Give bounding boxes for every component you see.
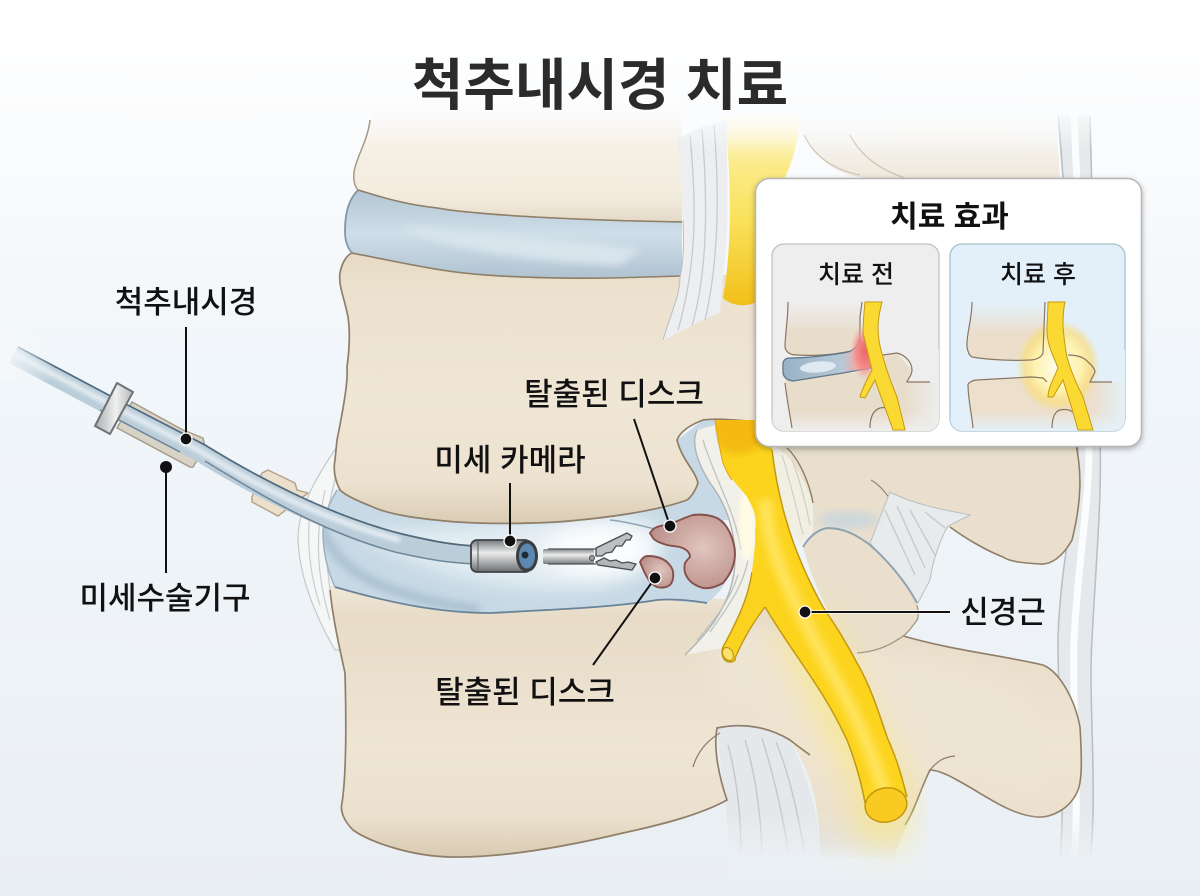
inset heading: 치료 효과 (890, 201, 1009, 234)
disc-side ligament (685, 425, 755, 655)
upper ligament (663, 120, 727, 340)
panel: before treatment: 치료 전 (818, 261, 894, 289)
tube fade (0, 335, 55, 380)
forceps (543, 533, 636, 570)
posterior ligament right (1058, 115, 1100, 860)
top vertebra (354, 108, 682, 222)
label: 탈출된 디스크 upper: 탈출된 디스크 (524, 377, 704, 412)
label: 미세 카메라 (434, 443, 586, 547)
micro camera (471, 540, 538, 572)
spine illustration (10, 115, 1102, 864)
lower disc (320, 420, 745, 613)
sheath collar (252, 470, 308, 516)
label: 미세수술기구: 미세수술기구 (79, 581, 251, 616)
label: 척추내시경 (115, 285, 257, 445)
panel: 치료 효과 (756, 178, 1142, 446)
label: 탈출된 디스크 lower (435, 572, 661, 710)
ring collar (95, 383, 133, 434)
bottom fade (728, 812, 1200, 884)
shadow patch above facet (818, 510, 878, 530)
pale strands right of nerve (772, 448, 813, 545)
endoscope (0, 335, 476, 564)
upper nerve (723, 115, 800, 305)
panel: before treatment (772, 244, 939, 431)
tube (13, 355, 476, 555)
label: 미세수술기구 (79, 461, 251, 616)
panel: after treatment: 치료 후 (1000, 261, 1076, 289)
middle posterior process (760, 430, 1080, 564)
nerve root (712, 406, 910, 826)
label: 척추내시경: 척추내시경 (115, 285, 257, 320)
upper posterior bone (797, 116, 1060, 178)
facet ligament (870, 492, 970, 603)
anterior ligament left (298, 448, 348, 650)
label: 미세 카메라: 미세 카메라 (434, 443, 586, 478)
label: 신경근: 신경근 (960, 595, 1046, 630)
top disc (345, 190, 682, 278)
facet joint (803, 528, 918, 653)
lower vertebra (330, 585, 1081, 858)
middle vertebra (334, 253, 760, 524)
panel: after treatment (950, 244, 1125, 431)
handle sleeve (117, 402, 205, 467)
top fade (682, 100, 1200, 150)
label: 탈출된 디스크 lower: 탈출된 디스크 (435, 675, 615, 710)
herniated disc upper (650, 515, 735, 588)
label: 신경근 (799, 595, 1046, 630)
nerve end (862, 784, 910, 826)
lower ligament (717, 726, 822, 860)
nerve glow (800, 620, 885, 845)
label: 탈출된 디스크 upper (524, 377, 704, 532)
title: 척추내시경 치료 (412, 54, 788, 117)
herniated disc lower (640, 556, 673, 588)
